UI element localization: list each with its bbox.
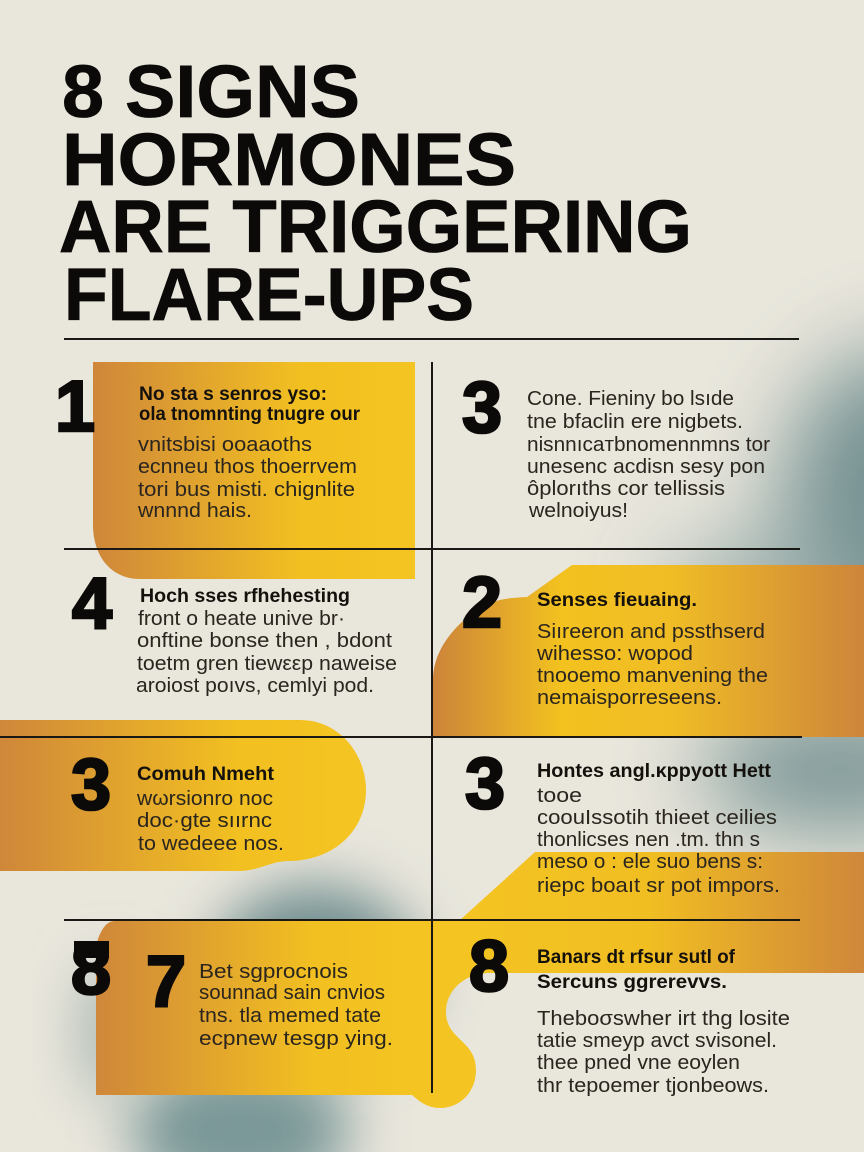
panel: sign 3 upper right: welnoiyus!	[528, 499, 628, 522]
panel: sign 3 lower right	[465, 744, 780, 897]
panel: sign 3 middle left: doc·gte sıırnc	[137, 809, 272, 832]
panel: sign 3 lower right: tooe	[537, 784, 582, 807]
title: ARE TRIGGERING	[59, 185, 692, 268]
panel: sign 2	[433, 563, 864, 737]
panel: sign 3 upper right: tne bfaclin ere nigbets.	[527, 410, 743, 433]
panel: sign 2: Siıreeron and pssthserd	[537, 620, 765, 643]
panel: sign 3 lower right: thonlicses nen .tm. thn s	[537, 828, 760, 851]
title: 8 SIGNS	[62, 50, 360, 133]
panel: sign 1: wnnnd hais.	[137, 499, 252, 522]
panel: sign 3 middle left: wωrsionro noc	[136, 787, 273, 810]
teal glow: bottom upper	[210, 885, 420, 1065]
title: FLARE-UPS	[64, 253, 474, 336]
panel: sign 4: Hoch sses rfhehesting	[140, 586, 350, 607]
panel: sign 2: 2	[462, 563, 502, 643]
panel: sign 1: 1	[55, 367, 95, 447]
panel: sign 4	[72, 564, 397, 697]
panel: sign 3 upper right: unesenc acdisn sesy pon	[527, 455, 765, 478]
panel: yellow band and sign 8: 8	[469, 927, 509, 1007]
panel: sign 3 lower right: riepc boaıt sr pot impors.	[537, 874, 780, 897]
panel: sign 7: sounnad sain cnvios	[199, 981, 385, 1004]
panel: sign 3 lower right: coouIssotih thieet ceilies	[537, 806, 777, 829]
teal glow: middle right	[700, 710, 864, 830]
panel: sign 1: No sta s senros yso:	[139, 384, 327, 405]
panel: sign 7: ecpnew tesgp ying.	[199, 1027, 393, 1050]
panel: yellow band and sign 8: Theboσswher irt thg losite	[537, 1007, 790, 1030]
teal glow: upper right lower spread	[660, 540, 864, 640]
panel: sign 3 lower right: meso o : ele suo bens s:	[537, 850, 763, 873]
panel: sign 4: front o heate unive br·	[138, 607, 345, 630]
teal glow: left of lower panel	[80, 960, 140, 1100]
panel: sign 7: 7	[146, 942, 186, 1022]
panel: sign 3 upper right: Cone. Fieniny bo lsıde	[527, 387, 734, 410]
panel: sign 3 upper right: nisnnıcaтbnomennmns tor	[527, 433, 770, 456]
panel: sign 3 upper right: 3	[462, 368, 502, 448]
panel: sign 3 lower right: Hontes angl.κppyott Hett	[537, 761, 772, 782]
panel: sign 4: toetm gren tiewεεp naweise	[137, 652, 397, 675]
panel: yellow band and sign 8: thr tepoemer tjonbeows.	[537, 1074, 769, 1097]
panel: sign 7	[71, 921, 432, 1095]
panel: yellow band and sign 8: Sercuns ggrerevvs.	[537, 972, 727, 993]
panel: sign 3 middle left: to wedeee nos.	[138, 832, 284, 855]
panel: sign 4: onftine bonse then , bdont	[137, 629, 392, 652]
panel: sign 2: wihesso: wopod	[536, 642, 693, 665]
panel: sign 2: tnooemo manvening the	[537, 664, 768, 687]
teal glow: upper right	[780, 350, 864, 670]
panel: sign 7: tns. tla memed tate	[199, 1004, 381, 1027]
panel: yellow band and sign 8: Banars dt rfsur sutl of	[537, 947, 736, 968]
panel: sign 2: nemaisporreseens.	[537, 686, 722, 709]
panel: sign 4: 4	[72, 564, 112, 644]
teal glow: bottom lower	[130, 1060, 350, 1152]
title	[59, 50, 692, 336]
panel: sign 4: aroiost poıvs, cemlyi pod.	[136, 674, 374, 697]
panel: yellow band and sign 8: thee pned vne eoylen	[537, 1051, 740, 1074]
panel: sign 1: vnitsbisi ooaaoths	[138, 433, 312, 456]
panel: sign 3 lower right: 3	[465, 744, 505, 824]
panel: sign 1: ola tnomnting tnugre our	[139, 404, 361, 425]
title: HORMONES	[62, 118, 516, 201]
panel: sign 3 upper right: ôplorıths cor tellissis	[527, 477, 725, 500]
panel: sign 2: Senses fieuaing.	[537, 590, 697, 611]
panel: sign 3 middle left: Comuh Nmeht	[137, 764, 275, 785]
panel: sign 7: 8	[71, 930, 111, 1010]
panel: sign 3 middle left: 3	[71, 745, 111, 825]
panel: sign 1: tori bus misti. chignlite	[138, 478, 355, 501]
panel: sign 1: ecnneu thos thoerrvem	[138, 455, 357, 478]
panel: sign 3 upper right	[462, 368, 770, 522]
panel: yellow band and sign 8	[412, 852, 864, 1108]
panel: yellow band and sign 8: tatie smeyp avct svisonel.	[537, 1029, 777, 1052]
panel: sign 3 middle left	[0, 720, 366, 871]
panel: sign 1	[55, 362, 415, 579]
panel: sign 7: Bet sgprocnois	[199, 960, 348, 983]
